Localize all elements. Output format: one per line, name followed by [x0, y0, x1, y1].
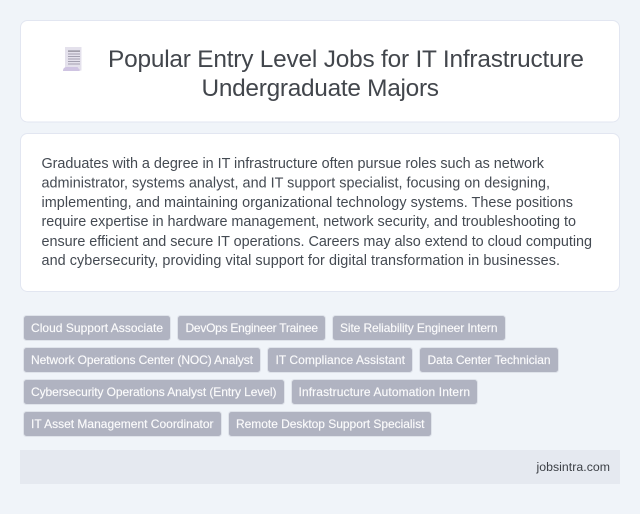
text block: description: and cybersecurity, providing vital support for digital transformation in businesses. — [42, 253, 560, 269]
text block: description: administrator, systems analyst, and IT support specialist, focusing on designing, — [42, 176, 550, 192]
tag: Cloud Support Associate — [24, 316, 170, 340]
tag: Data Center Technician — [420, 348, 558, 372]
tag: Site Reliability Engineer Intern — [332, 316, 506, 340]
tag: Data Center Technician: Data Center Technician — [428, 353, 550, 367]
tag: Network Operations Center (NOC) Analyst: Network Operations Center (NOC) Analyst — [31, 353, 254, 367]
job tags — [24, 316, 558, 436]
text block: description — [42, 156, 592, 269]
text block: description: Graduates with a degree in IT infrastructure often pursue roles such as network — [42, 156, 545, 172]
tag: Network Operations Center (NOC) Analyst — [24, 348, 260, 372]
tag: Cybersecurity Operations Analyst (Entry Level): Cybersecurity Operations Analyst (Entry Level) — [31, 385, 276, 399]
tag: Infrastructure Automation Intern — [292, 380, 478, 404]
title — [108, 46, 584, 102]
tag: Infrastructure Automation Intern: Infrastructure Automation Intern — [298, 385, 470, 399]
icon: document scroll — [63, 47, 82, 71]
tag: Cloud Support Associate: Cloud Support Associate — [31, 321, 163, 335]
tag: Site Reliability Engineer Intern: Site Reliability Engineer Intern — [340, 321, 498, 335]
tag: Remote Desktop Support Specialist — [228, 412, 432, 436]
tag: IT Compliance Assistant: IT Compliance Assistant — [276, 353, 406, 367]
tag: DevOps Engineer Trainee — [178, 316, 326, 340]
title: Undergraduate Majors — [202, 75, 439, 102]
tag: Remote Desktop Support Specialist: Remote Desktop Support Specialist — [236, 417, 425, 431]
text block: description: implementing, and maintaining organizational technology systems. These positions — [42, 195, 573, 211]
tag: Cybersecurity Operations Analyst (Entry Level) — [24, 380, 284, 404]
text block: description: ensure efficient and secure IT operations. Careers may also extend to cloud computing — [42, 234, 592, 250]
title: Popular Entry Level Jobs for IT Infrastructure — [108, 46, 584, 73]
tag: IT Asset Management Coordinator — [24, 412, 222, 436]
tag: IT Asset Management Coordinator: IT Asset Management Coordinator — [31, 417, 214, 431]
footer — [20, 450, 620, 484]
tag: IT Compliance Assistant — [268, 348, 412, 372]
tag: DevOps Engineer Trainee: DevOps Engineer Trainee — [186, 321, 318, 335]
panel: header — [20, 20, 620, 122]
text block: description: require expertise in hardware management, network security, and troubleshooting to — [42, 214, 576, 230]
panel: description — [20, 134, 620, 292]
footer: jobsintra.com — [536, 460, 610, 474]
